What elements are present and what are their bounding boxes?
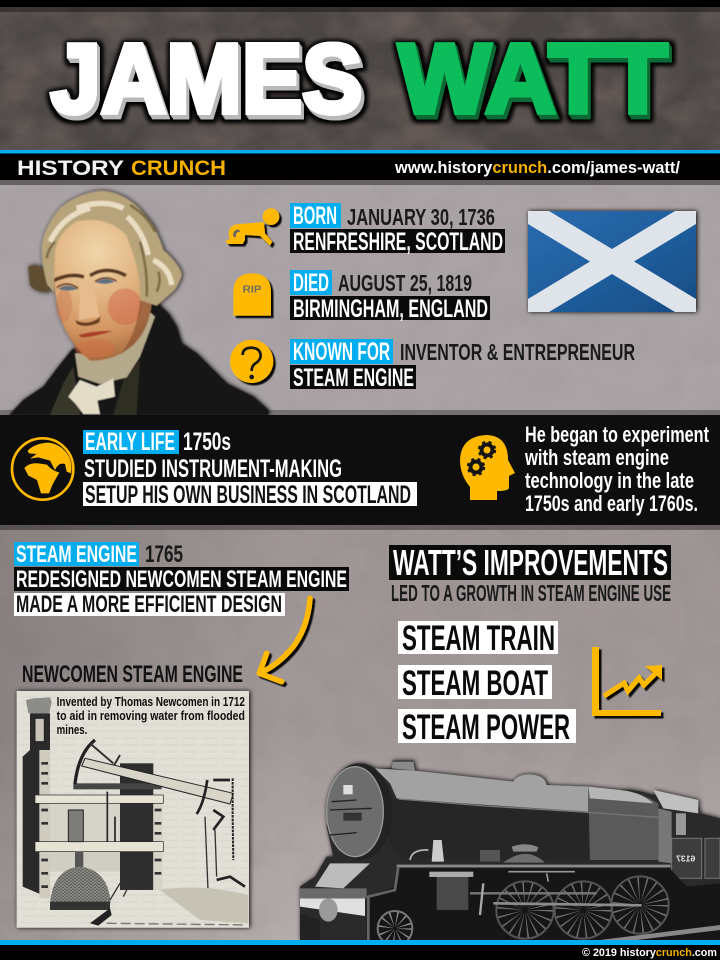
caption: to aid in removing water from flooded xyxy=(57,709,245,723)
arrow to newcomen engine xyxy=(259,598,310,682)
text block: born: BORN xyxy=(293,202,337,230)
steam engine text: STEAM ENGINE xyxy=(16,541,137,568)
title xyxy=(50,24,668,134)
paragraph: steam engine experiments xyxy=(524,422,709,516)
paragraph: steam engine experiments: with steam engine xyxy=(524,445,669,470)
icon: gravestone xyxy=(233,273,271,316)
caption: mines. xyxy=(57,723,87,737)
brand logo xyxy=(17,157,226,180)
icon: question mark xyxy=(230,340,273,383)
portrait of James Watt xyxy=(9,191,268,415)
list: steam train: STEAM TRAIN xyxy=(402,619,555,658)
early life text: STUDIED INSTRUMENT-MAKING xyxy=(84,455,342,483)
icon: growth chart xyxy=(592,647,662,716)
panel: title band xyxy=(0,7,720,150)
early life text: EARLY LIFE xyxy=(85,428,175,456)
panel: steam engine xyxy=(0,525,720,946)
steam engine text: REDESIGNED NEWCOMEN STEAM ENGINE xyxy=(16,566,347,593)
copyright: © 2019 historycrunch.com xyxy=(582,947,717,959)
list: steam train xyxy=(398,619,558,658)
list: steam boat xyxy=(398,664,552,703)
icon: crawling baby xyxy=(226,208,279,246)
brand logo: CRUNCH xyxy=(131,157,226,180)
head xyxy=(28,191,182,361)
early life text xyxy=(83,428,417,509)
text block: born xyxy=(290,202,505,256)
website url: www.historycrunch.com/james-watt/ xyxy=(394,158,680,177)
icon: globe xyxy=(12,438,73,500)
scottish flag xyxy=(528,211,696,312)
icon: head with gears xyxy=(460,435,515,500)
steam engine text: MADE A MORE EFFICIENT DESIGN xyxy=(16,591,282,618)
header bar xyxy=(0,150,720,180)
text block: known for xyxy=(290,338,635,392)
text block: known for: STEAM ENGINE xyxy=(293,364,414,392)
text block: born: RENFRESHIRE, SCOTLAND xyxy=(293,228,503,256)
steam engine text: 1765 xyxy=(145,541,183,568)
title: JAMES xyxy=(50,24,362,134)
list: steam power: STEAM POWER xyxy=(402,708,570,747)
icon: gravestone: RIP xyxy=(243,285,261,296)
newcomen engine engraving xyxy=(17,691,249,928)
early life text: 1750s xyxy=(183,428,231,456)
text block: known for: KNOWN FOR xyxy=(293,338,390,366)
text block: born: JANUARY 30, 1736 xyxy=(347,204,495,230)
title: WATT xyxy=(398,24,668,134)
steam locomotive photo xyxy=(300,761,720,946)
text block: died: AUGUST 25, 1819 xyxy=(338,270,472,296)
caption xyxy=(57,695,245,737)
steam engine text xyxy=(14,541,349,618)
text block: died: BIRMINGHAM, ENGLAND xyxy=(293,295,488,323)
early life text: SETUP HIS OWN BUSINESS IN SCOTLAND xyxy=(85,481,411,509)
coat, neckcloth and cravat xyxy=(9,303,268,415)
steam locomotive photo: 6137 xyxy=(676,854,695,864)
text block: died: DIED xyxy=(293,269,329,297)
brand logo: HISTORY xyxy=(17,157,124,180)
heading: newcomen steam engine: NEWCOMEN STEAM ENGINE xyxy=(22,661,243,688)
heading: watt's improvements xyxy=(389,542,671,606)
list: steam boat: STEAM BOAT xyxy=(402,664,548,703)
caption: Invented by Thomas Newcomen in 1712 xyxy=(57,695,245,709)
text block: died xyxy=(290,269,490,323)
list: steam power xyxy=(398,708,576,747)
footer xyxy=(0,940,720,960)
icons group: baby, gravestone, question mark xyxy=(226,208,279,383)
panel: biography xyxy=(0,180,720,415)
panel: early life xyxy=(0,415,720,525)
